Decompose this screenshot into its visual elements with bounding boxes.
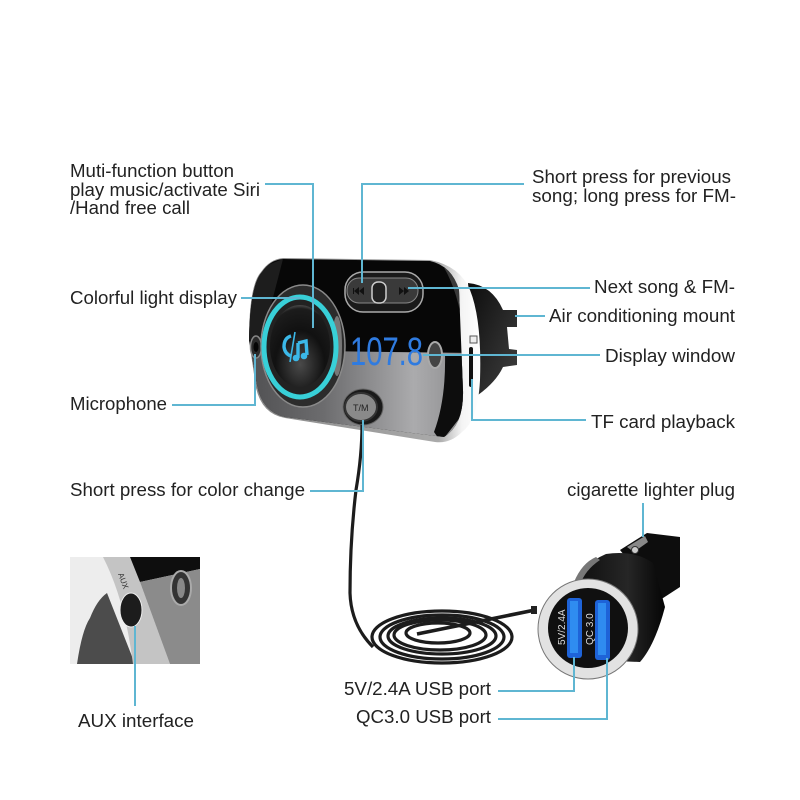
arrow: TF card [472, 379, 586, 420]
arrow: mount [515, 315, 545, 317]
label: multi-function button: Muti-function button [70, 161, 234, 181]
music call glyph [284, 332, 307, 362]
color change button: T/M [353, 403, 368, 413]
microphone hole [250, 336, 262, 358]
color change button [343, 389, 383, 425]
label: color change: Short press for color change [70, 480, 305, 500]
multi-function knob with light ring [261, 285, 345, 407]
inset photo: AUX interface: AUX [116, 572, 130, 591]
photo: car charger [538, 533, 680, 679]
LED display reading: 107.8 [350, 330, 423, 374]
label: display window: Display window [605, 346, 736, 366]
cable [350, 425, 537, 663]
5V printed label: 5V/2.4A [557, 609, 568, 645]
label: TF card playback: TF card playback [591, 412, 736, 432]
inset photo: AUX interface [70, 557, 200, 664]
arrow: AUX [134, 626, 136, 706]
charger barrel [572, 553, 665, 662]
arrow: next song [408, 287, 590, 289]
arrow: display window [423, 354, 600, 356]
label: colorful light display: Colorful light display [70, 288, 237, 308]
label: previous song: song; long press for FM- [532, 186, 736, 206]
button slot [428, 342, 442, 368]
label: previous song: Short press for previous [532, 167, 731, 187]
label: air conditioning mount: Air conditioning mount [549, 306, 735, 326]
label: previous song [532, 167, 736, 206]
5V port [567, 598, 582, 658]
charger plug tip [620, 533, 680, 600]
label: multi-function button [70, 161, 260, 218]
arrow: light display [241, 297, 300, 299]
charger face ring [538, 579, 638, 679]
leader lines [135, 184, 643, 719]
label: multi-function button: /Hand free call [70, 198, 190, 218]
arrow: cigarette plug [642, 503, 644, 537]
label: microphone: Microphone [70, 394, 167, 414]
label: QC3.0 USB port: QC3.0 USB port [356, 707, 491, 727]
label: next song: Next song & FM- [594, 277, 735, 297]
arrow: previous song [362, 184, 524, 283]
arrow: microphone [172, 354, 255, 405]
arrow: 5V port [498, 657, 574, 691]
label: 5V USB port: 5V/2.4A USB port [344, 679, 491, 699]
QC port [595, 600, 610, 660]
previous and next rocker buttons [345, 272, 423, 312]
TF card slot [469, 336, 477, 387]
photo: air vent mount [468, 283, 517, 395]
arrow: color change [310, 420, 363, 491]
label: cigarette lighter plug: cigarette lighter plug [567, 480, 735, 500]
label: multi-function button: play music/activate Siri [70, 180, 260, 200]
arrow: QC port [498, 658, 607, 719]
photo: FM transmitter body [245, 255, 480, 445]
arrow: multi-function [265, 184, 313, 328]
label: AUX interface: AUX interface [78, 711, 194, 731]
QC printed label: QC 3.0 [585, 613, 596, 645]
